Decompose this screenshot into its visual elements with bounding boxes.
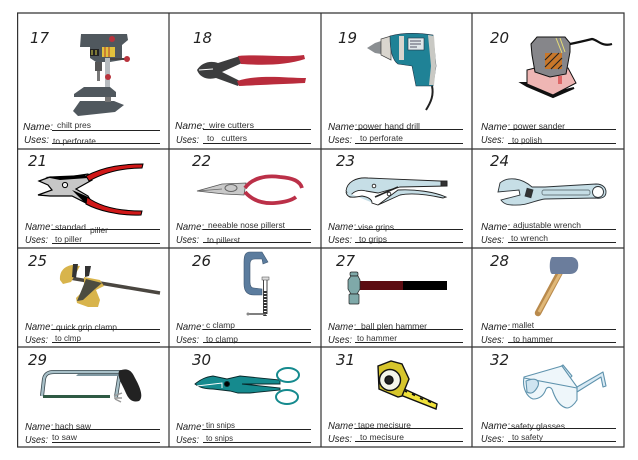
number 26: 26 — [192, 252, 211, 270]
panel: 22 needle nose pliers — [176, 152, 311, 246]
panel: 28 mallet — [481, 252, 616, 346]
value uses: to wrench — [511, 233, 548, 243]
value name: c clamp — [206, 320, 235, 330]
value name: neeable nose pillerst — [208, 220, 286, 230]
label name: Name: — [23, 121, 53, 133]
icon: ball peen hammer — [348, 272, 447, 304]
value uses: to safety — [512, 432, 544, 442]
label uses: Uses: — [25, 434, 48, 446]
label name: Name: — [481, 221, 510, 233]
label uses: Uses: — [176, 234, 199, 246]
label uses: Uses: — [481, 433, 504, 445]
value name: power sander — [513, 121, 565, 131]
panel: 32 safety glasses — [481, 351, 616, 445]
number 19: 19 — [338, 29, 357, 47]
icon: tape measure — [378, 361, 437, 409]
value name: standad — [55, 222, 86, 232]
value uses: to cutters — [207, 133, 247, 143]
value uses: to snips — [206, 433, 233, 443]
value name: power hand drill — [358, 121, 420, 131]
number 28: 28 — [490, 252, 509, 270]
panel: 25 quick grip clamp — [25, 252, 160, 346]
label name: Name: — [25, 321, 53, 333]
icon: drill press — [73, 34, 130, 116]
label name: Name: — [176, 321, 204, 333]
icon: c clamp — [244, 252, 269, 316]
label uses: Uses: — [481, 234, 504, 246]
number 22: 22 — [192, 152, 211, 170]
label uses: Uses: — [481, 334, 504, 346]
value uses: to saw — [52, 432, 78, 442]
label uses: Uses: — [24, 134, 49, 146]
value name: ball plen hammer — [361, 321, 427, 331]
panel: 31 tape measure — [328, 351, 463, 445]
value uses: to polish — [512, 135, 542, 145]
value name: tape mecisure — [358, 420, 411, 430]
number 32: 32 — [490, 351, 509, 369]
label name: Name: — [481, 121, 510, 133]
label name: Name: — [25, 421, 53, 433]
panel: 18 wire cutters — [175, 29, 311, 146]
value uses: to pillerst — [207, 235, 241, 245]
icon: power hand drill — [367, 33, 436, 110]
panel: 29 hack saw — [25, 351, 160, 446]
number 29: 29 — [28, 351, 47, 369]
icon: vise grips — [346, 178, 447, 205]
value name: quick grip clamp — [56, 322, 117, 332]
label name: Name: — [328, 321, 356, 333]
label uses: Uses: — [176, 134, 199, 146]
number 17: 17 — [30, 29, 50, 47]
number 18: 18 — [193, 29, 212, 47]
label name: Name: — [176, 221, 204, 233]
panel: 17 drill press — [23, 29, 160, 146]
icon: adjustable wrench — [498, 179, 606, 205]
icon: safety glasses — [524, 365, 606, 408]
icon: needle nose pliers — [197, 176, 302, 203]
number 24: 24 — [490, 152, 509, 170]
value uses: to clamp — [206, 334, 238, 344]
label name: Name: — [481, 420, 510, 432]
icon: hack saw — [42, 369, 141, 402]
value name: wire cutters — [208, 120, 254, 130]
icon: mallet — [538, 257, 578, 313]
value name: mallet — [512, 320, 535, 330]
value name: chilt pres — [57, 120, 91, 130]
label name: Name: — [25, 221, 53, 233]
value name: hach saw — [55, 421, 92, 431]
number 21: 21 — [28, 152, 47, 170]
value uses: to hammer — [357, 333, 397, 343]
value uses: to hammer — [513, 334, 553, 344]
icon: wire cutters — [197, 55, 306, 86]
label uses: Uses: — [328, 334, 352, 346]
label uses: Uses: — [176, 434, 199, 446]
label name: Name: — [481, 321, 510, 333]
value name: tin snips — [206, 420, 235, 430]
label name: Name: — [328, 221, 356, 233]
label uses: Uses: — [176, 334, 199, 346]
label name: Name: — [175, 120, 205, 132]
value uses: to mecisure — [360, 432, 404, 442]
panel: 24 adjustable wrench — [481, 152, 616, 246]
icon: standard pliers — [38, 164, 143, 215]
label name: Name: — [328, 420, 356, 432]
number 27: 27 — [336, 252, 356, 270]
icon: power sander — [522, 37, 612, 97]
number 31: 31 — [336, 351, 355, 369]
panel: 26 c clamp — [176, 252, 311, 346]
label uses: Uses: — [481, 134, 504, 146]
value name: safety glasses — [511, 421, 565, 431]
value name: adjustable wrench — [513, 220, 581, 230]
value uses: to perforate — [360, 133, 403, 143]
icon: tin snips — [195, 368, 299, 404]
panel: 21 standard pliers — [25, 152, 160, 246]
number 20: 20 — [490, 29, 509, 47]
number 30: 30 — [192, 351, 211, 369]
label uses: Uses: — [25, 334, 48, 346]
number 25: 25 — [28, 252, 47, 270]
panel: 19 power hand drill — [328, 29, 463, 146]
panel: 23 vise grips — [328, 152, 463, 246]
panel: 20 power sander — [481, 29, 616, 146]
label name: Name: — [328, 121, 357, 133]
label name: Name: — [176, 421, 204, 433]
number 23: 23 — [336, 152, 355, 170]
value name: vise grips — [358, 222, 394, 232]
value uses: to piller — [55, 234, 82, 244]
label uses: Uses: — [328, 433, 352, 445]
icon: quick grip clamp — [60, 264, 160, 307]
value uses: to grips — [359, 234, 387, 244]
panel: 27 ball peen hammer — [328, 252, 463, 346]
value uses: to clmp — [55, 333, 81, 343]
panel: 30 tin snips — [176, 351, 311, 446]
label uses: Uses: — [328, 234, 352, 246]
value name second word: piller — [90, 225, 108, 235]
label uses: Uses: — [25, 234, 48, 246]
label uses: Uses: — [328, 134, 352, 146]
value uses: to perforate — [53, 136, 96, 146]
